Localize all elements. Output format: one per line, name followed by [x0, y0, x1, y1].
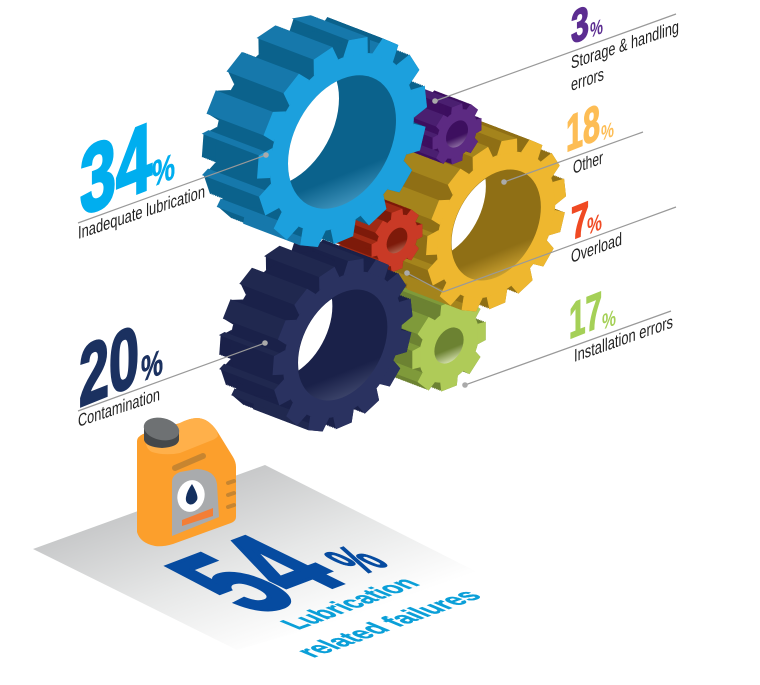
- stat: 18% other: [501, 94, 643, 185]
- gear: blue: [202, 15, 427, 247]
- headline caption: Lubrication: [272, 574, 427, 632]
- stat: 18% other: Other: [573, 147, 603, 178]
- gear: purple: [395, 66, 481, 187]
- gear: green: [356, 244, 486, 426]
- stat: 34% inadequate lubrication: Inadequate lubrication: [78, 181, 205, 243]
- floor panel: [33, 465, 487, 650]
- headline stat: 54%: 54: [131, 519, 381, 631]
- stat: 7% overload: 7: [571, 192, 589, 251]
- stat: 17% installation errors: Installation errors: [574, 311, 673, 366]
- stat: 20% contamination: Contamination: [78, 383, 160, 431]
- stat: 17% installation errors: [462, 282, 673, 388]
- gear: red: [333, 170, 422, 296]
- headline caption: related failures: [287, 586, 489, 661]
- icon: oil jug: [137, 414, 236, 546]
- stat: 3% storage and handling errors: Storage & handling: [571, 16, 679, 73]
- stat: 20% contamination: 20: [79, 306, 139, 425]
- stat: 17% installation errors: %: [602, 304, 616, 335]
- stat: 3% storage and handling errors: errors: [571, 63, 604, 95]
- stat: 7% overload: [404, 192, 676, 292]
- gear: yellow: [383, 122, 566, 312]
- gear: navy: [219, 239, 412, 432]
- stat: 17% installation errors: 17: [569, 282, 602, 351]
- stat: 18% other: 18: [566, 94, 600, 164]
- stat: 7% overload: Overload: [571, 228, 622, 267]
- stat: 34% inadequate lubrication: [78, 102, 269, 243]
- stat: 34% inadequate lubrication: %: [152, 145, 175, 195]
- stat: 20% contamination: [78, 306, 268, 431]
- stat: 3% storage and handling errors: [432, 0, 679, 104]
- headline stat: 54%: %: [308, 539, 404, 581]
- stat: 20% contamination: %: [141, 341, 163, 390]
- stat: 7% overload: %: [587, 209, 602, 241]
- stat: 3% storage and handling errors: %: [590, 14, 603, 43]
- stat: 34% inadequate lubrication: 34: [80, 102, 152, 236]
- stat: 18% other: %: [601, 117, 614, 146]
